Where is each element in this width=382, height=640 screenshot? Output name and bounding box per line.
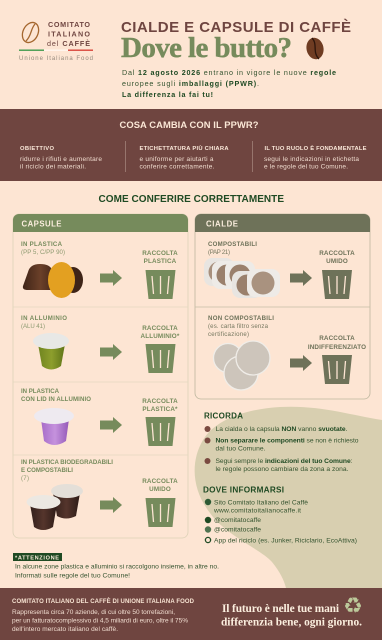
panel: capsule <box>13 214 188 538</box>
dividers <box>126 141 252 172</box>
bullet 2: Non separare le componenti se non è richiesto <box>216 438 359 444</box>
attenzione callout: In alcune zone plastica e alluminio si raccolgono insieme, in altre no. <box>15 564 219 570</box>
item: plastica con lid: IN PLASTICA <box>21 388 60 395</box>
intro text <box>122 68 336 99</box>
title: CIALDE E CAPSULE DI CAFFÈ <box>121 19 351 36</box>
destination: RACCOLTA <box>142 250 178 257</box>
item: alluminio <box>21 315 180 373</box>
destination <box>142 478 178 527</box>
logo wordmark: ITALIANO <box>48 30 90 38</box>
destination <box>319 250 355 299</box>
destination: UMIDO <box>149 486 171 493</box>
dove informarsi <box>203 486 357 544</box>
destination: ALLUMINIO* <box>141 333 180 340</box>
heading: come conferire: COME CONFERIRE CORRETTAMENTE <box>98 194 284 205</box>
capsule header: CAPSULE <box>22 220 62 228</box>
slogan <box>221 603 362 628</box>
column: obiettivo: ridurre i rifiuti e aumentare <box>20 156 102 163</box>
column: obiettivo: il riciclo dei materiali. <box>20 164 86 170</box>
bullet 3: le regole possono cambiare da zona a zona. <box>216 466 349 473</box>
intro text: europee sugli imballaggi (PPWR). <box>122 79 259 88</box>
item: plastica con lid <box>21 388 178 446</box>
pods image <box>214 341 270 390</box>
item: alluminio: (ALU 41) <box>21 323 45 330</box>
heading: DOVE INFORMARSI <box>203 486 284 494</box>
slogan: differenzia bene, ogni giorno. <box>221 616 362 628</box>
cialde header <box>195 214 370 232</box>
icon: coffee bean logo <box>19 20 42 45</box>
destination: RACCOLTA <box>319 335 355 342</box>
item: non compostabili: (es. carta filtro senza <box>208 323 269 330</box>
column: etichettatura: ETICHETTATURA PIÙ CHIARA <box>140 145 229 152</box>
capsule header <box>13 214 188 232</box>
item: compostabili: (PAP 21) <box>208 249 230 256</box>
logo subtitle: Unione Italiana Food <box>19 56 93 62</box>
arrow <box>100 270 122 286</box>
item: biodegradabili <box>21 459 178 530</box>
capsule image: aluminium <box>33 333 69 370</box>
item: biodegradabili: IN PLASTICA BIODEGRADABILI <box>21 459 113 466</box>
pods image <box>204 258 280 298</box>
item: plastica <box>21 241 178 299</box>
column: ruolo: IL TUO RUOLO È FONDAMENTALE <box>264 144 367 152</box>
arrow <box>100 417 122 433</box>
destination <box>142 398 178 446</box>
column: etichettatura: e uniforme per aiutarti a <box>140 156 214 163</box>
ricorda <box>204 412 359 473</box>
destination: PLASTICA* <box>142 406 178 413</box>
heading: COSA CAMBIA CON IL PPWR? <box>120 119 259 130</box>
destination: RACCOLTA <box>142 398 178 405</box>
icon: recycle: ♻ <box>343 594 363 619</box>
destination <box>141 325 180 373</box>
slogan: Il futuro è nelle tue mani <box>222 603 339 615</box>
logo wordmark <box>47 20 90 48</box>
icon: coffee bean <box>304 36 326 61</box>
attenzione callout <box>13 553 219 580</box>
logo wordmark: del CAFFÈ <box>47 39 90 48</box>
footer heading: COMITATO ITALIANO DEL CAFFÈ DI UNIONE ITALIANA FOOD <box>12 597 195 605</box>
bullet 1: La cialda o la capsula NON vanno svuotate. <box>216 426 348 433</box>
destination: UMIDO <box>326 258 348 265</box>
footer <box>0 588 382 640</box>
item: plastica con lid: CON LID IN ALLUMINIO <box>21 396 91 403</box>
panel: cosa cambia <box>0 109 382 181</box>
item: non compostabili: NON COMPOSTABILI <box>208 315 274 322</box>
link: facebook: @comitatocaffe <box>214 517 261 524</box>
arrow <box>290 270 312 286</box>
item: plastica: IN PLASTICA <box>21 241 63 248</box>
logo <box>19 20 93 62</box>
arrow <box>290 355 312 371</box>
item: compostabili: COMPOSTABILI <box>208 241 257 248</box>
capsule image: plastic <box>23 262 83 298</box>
footer text: per un fatturatocomplessivo di 4,5 miliardi di euro, oltre il 75% <box>12 618 188 624</box>
capsule image: compostable <box>26 484 83 530</box>
item: alluminio: IN ALLUMINIO <box>21 315 67 322</box>
destination: RACCOLTA <box>142 478 178 485</box>
column: ruolo: e le regole del tuo Comune. <box>264 164 348 170</box>
cialde header: CIALDE <box>206 220 238 228</box>
capsule image: purple <box>34 408 74 445</box>
column: etichettatura: conferire correttamente. <box>140 164 215 170</box>
arrow <box>100 497 122 513</box>
decorative blob <box>195 407 382 588</box>
destination <box>142 250 178 299</box>
link: sito <box>205 499 308 514</box>
item: non compostabili <box>208 315 366 390</box>
link: sito: Sito Comitato Italiano del Caffè <box>214 500 308 506</box>
destination: RACCOLTA <box>319 250 355 257</box>
destination: PLASTICA <box>144 258 177 265</box>
column: obiettivo <box>20 146 102 170</box>
bullet 2 <box>204 438 359 452</box>
heading: RICORDA <box>204 412 243 420</box>
destination: RACCOLTA <box>142 325 178 332</box>
item: non compostabili: certificazione) <box>208 331 249 338</box>
attenzione callout: *ATTENZIONE <box>15 556 59 562</box>
destination: INDIFFERENZIATO <box>308 344 366 351</box>
link: instagram: @comitatocaffe <box>214 526 261 534</box>
item: biodegradabili: (7) <box>21 475 29 482</box>
footer text: dell'intero mercato italiano del caffè. <box>12 626 118 633</box>
intro text: La differenza la fai tu! <box>122 90 213 99</box>
subtitle: Dove le butto? <box>121 32 292 64</box>
destination <box>308 335 366 384</box>
bullet 3 <box>204 458 353 473</box>
link: app: App del riciclo (es. Junker, Riciclario, EcoAttiva) <box>214 538 357 544</box>
item: plastica: (PP 5, C/PP 90) <box>21 249 65 256</box>
column: etichettatura <box>140 145 229 170</box>
footer text: Rappresenta circa 70 aziende, di cui oltre 50 torrefazioni, <box>12 609 175 616</box>
arrow <box>100 344 122 360</box>
panel: cialde <box>195 214 370 399</box>
column: ruolo <box>264 144 367 170</box>
attenzione callout: Informati sulle regole del tuo Comune! <box>15 572 130 580</box>
item: biodegradabili: E COMPOSTABILI <box>21 467 73 474</box>
link: sito: www.comitatoitalianocaffe.it <box>213 508 301 514</box>
column: obiettivo: OBIETTIVO <box>20 146 54 152</box>
bullet 2: dal tuo Comune. <box>216 446 266 452</box>
intro text: Dal 12 agosto 2026 entrano in vigore le nuove regole <box>122 68 336 77</box>
footer text <box>12 609 188 633</box>
logo flag line <box>19 50 93 51</box>
bullet 3: Segui sempre le indicazioni del tuo Comune: <box>216 458 353 465</box>
item: compostabili <box>204 241 355 299</box>
logo wordmark: COMITATO <box>48 20 90 29</box>
column: ruolo: segui le indicazioni in etichetta <box>264 156 359 163</box>
